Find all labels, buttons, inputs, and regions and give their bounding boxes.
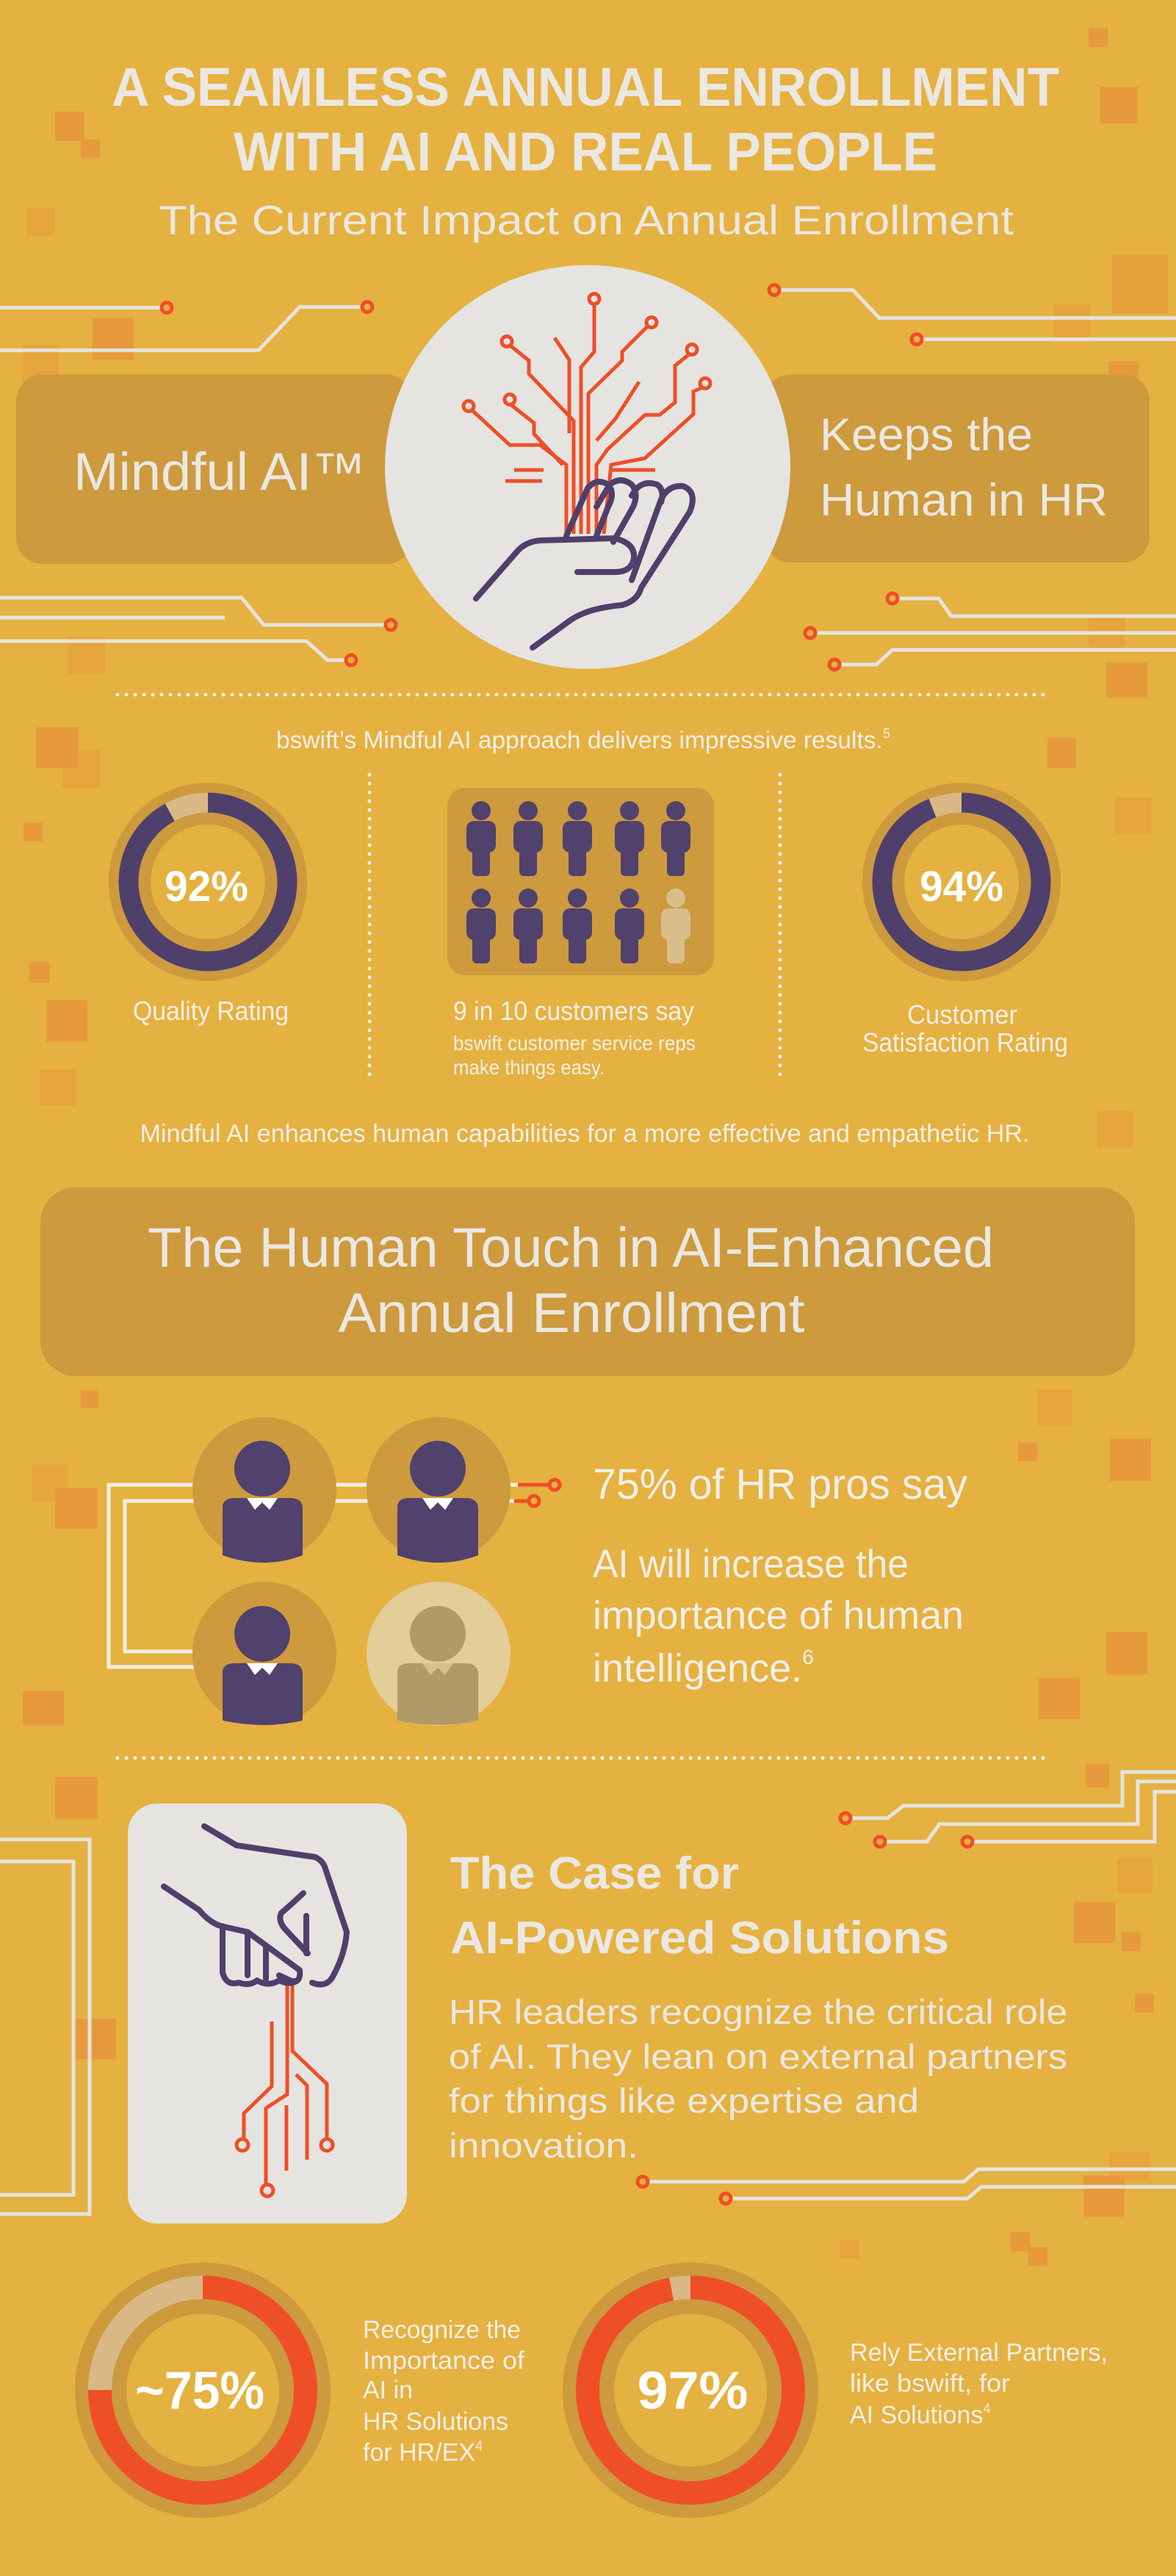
box: Mindful AI (16, 375, 413, 564)
stat: 75% of HR pros (593, 1461, 967, 1690)
text: intro results: bswift’s Mindful AI approach delivers impressive results. (276, 726, 874, 753)
circuit lines top (0, 290, 1176, 665)
paragraph: innovation. (449, 2126, 638, 2165)
label: recognize importance: for HR/EX (363, 2439, 475, 2467)
donut: 94% satisfaction: Satisfaction Rating (862, 1027, 1068, 1057)
divider dotted (118, 693, 1052, 696)
stat: 75% of HR pros: 75% of HR pros say (593, 1461, 967, 1508)
donut: 92% quality rating: 92% (165, 863, 248, 911)
donut: 94% satisfaction (862, 783, 1068, 1057)
donut: 94% satisfaction: Customer (907, 999, 1017, 1030)
divider dotted (118, 1756, 1052, 1759)
pictogram: 9 in 10 customers (447, 788, 714, 975)
donut: 97% (563, 2262, 818, 2518)
stat: 75% of HR pros: AI will increase the (593, 1542, 909, 1586)
label: recognize importance: 4 (475, 2439, 483, 2453)
donut: ~75%: ~75% (135, 2362, 264, 2420)
icon: hand with circuit tree (385, 265, 790, 669)
text: 9 in 10 customers say: make things easy. (453, 1056, 605, 1079)
label: recognize importance: AI in (363, 2376, 413, 2404)
paragraph: of AI. They lean on external partners (449, 2037, 1067, 2076)
title: WITH AI AND REAL PEOPLE (234, 121, 937, 182)
banner: The Human Touch (40, 1187, 1135, 1376)
people circles with connector lines (109, 1417, 560, 1726)
donut: ~75% (75, 2262, 331, 2518)
box: Mindful AI: Mindful AI™ (73, 443, 366, 502)
donut: 97%: 97% (638, 2362, 748, 2420)
label: rely external partners: 4 (983, 2401, 990, 2416)
label: recognize importance: Recognize the (363, 2316, 521, 2344)
text: Mindful AI enhances: Mindful AI enhances human capabilities for a more effective and empathetic HR. (140, 1120, 1030, 1148)
card: hand holding circuit (128, 1803, 407, 2224)
donut: 94% satisfaction: 94% (920, 863, 1003, 911)
title: A SEAMLESS ANNUAL ENROLLMENT (112, 57, 1059, 117)
stat: 75% of HR pros: importance of human (593, 1593, 964, 1638)
paragraph: HR leaders recognize the critical role (449, 1992, 1067, 2031)
stat: 75% of HR pros: 6 (802, 1646, 814, 1668)
paragraph (449, 1992, 1067, 2165)
box: Keeps the Human in HR: Human in HR (820, 475, 1108, 526)
text: 9 in 10 customers say: 9 in 10 customers say (453, 996, 694, 1026)
subtitle: The Current Impact on Annual Enrollment (159, 197, 1014, 243)
text: 9 in 10 customers say (453, 996, 696, 1079)
label: rely external partners: Rely External Partners, (850, 2339, 1108, 2367)
box: Keeps the Human in HR: Keeps the (820, 410, 1033, 460)
banner: The Human Touch: The Human Touch in AI-Enhanced (148, 1217, 994, 1279)
stat: 75% of HR pros: intelligence. (593, 1646, 802, 1690)
label: recognize importance: HR Solutions (363, 2408, 508, 2436)
heading: The Case for AI-Powered Solutions (450, 1848, 949, 1964)
circuit lines bottom (0, 1772, 1176, 2214)
text: intro results: 5 (883, 726, 890, 741)
label: recognize importance: Importance of (363, 2347, 525, 2375)
donut: 92% quality rating (109, 783, 307, 1026)
label: rely external partners (850, 2339, 1108, 2429)
dotted separators (369, 775, 780, 1079)
label: recognize importance (363, 2316, 525, 2467)
text: 9 in 10 customers say: bswift customer service reps (453, 1032, 696, 1054)
label: rely external partners: AI Solutions (850, 2401, 983, 2429)
label: rely external partners: like bswift, for (850, 2370, 1010, 2398)
banner: The Human Touch: Annual Enrollment (338, 1282, 805, 1345)
heading: The Case for AI-Powered Solutions: The Case for (450, 1848, 739, 1899)
box: Keeps the Human in HR (764, 375, 1150, 562)
title (112, 57, 1059, 182)
heading: The Case for AI-Powered Solutions: AI-Powered Solutions (450, 1913, 949, 1964)
donut: 92% quality rating: Quality Rating (133, 996, 289, 1026)
paragraph: for things like expertise and (449, 2081, 919, 2120)
